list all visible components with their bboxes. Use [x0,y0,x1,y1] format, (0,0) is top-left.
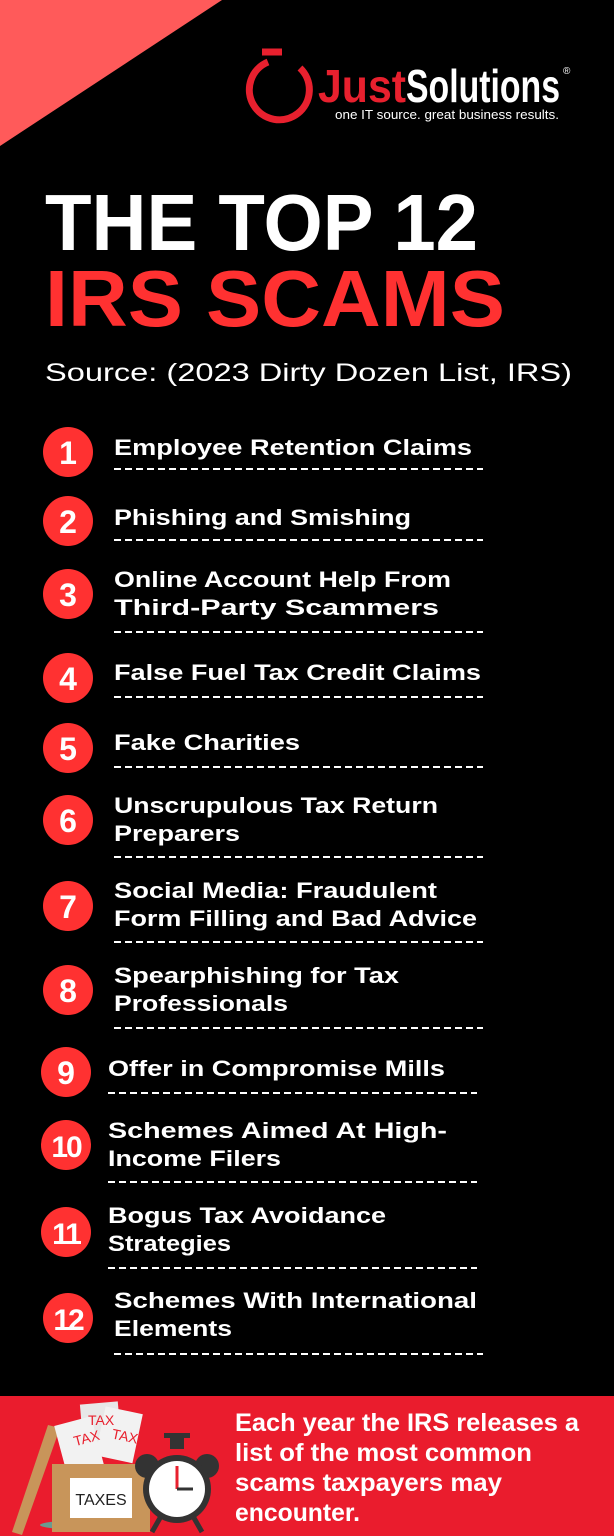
item 10: Schemes Aimed At High- [108,1118,447,1143]
item 2: 2 [59,504,77,540]
item 12: Schemes With International [114,1288,477,1313]
list of scams [41,427,483,1354]
item 3 [43,567,483,632]
item 3: Third-Party Scammers [114,595,439,620]
title [45,178,505,343]
item 8: Professionals [114,991,288,1016]
icon: alarm clock [135,1433,219,1532]
item 11: 11 [52,1218,81,1251]
title: THE TOP 12 [45,178,478,267]
icon: tax box [12,1401,150,1535]
item 12 [43,1288,483,1354]
logo [249,52,571,122]
item 7: Form Filling and Bad Advice [114,906,477,931]
icon: tax box: TAX [111,1426,140,1447]
item 2 [43,496,483,546]
item 1: Employee Retention Claims [114,435,472,460]
item 11 [41,1203,477,1268]
item 7 [43,878,483,942]
item 6 [43,793,483,857]
item 1 [43,427,483,477]
item 11: Strategies [108,1231,231,1256]
item 7: Social Media: Fraudulent [114,878,438,903]
item 12: Elements [114,1316,232,1341]
item 10 [41,1118,477,1182]
decorative corner triangle [0,0,222,146]
item 9 [41,1047,477,1097]
logo: Solutions [406,60,560,112]
footer text: encounter. [235,1499,360,1527]
title: IRS SCAMS [45,254,505,343]
item 10: 10 [51,1131,82,1164]
footer text [235,1409,580,1527]
icon: tax box: TAX [88,1412,115,1428]
item 3: Online Account Help From [114,567,451,592]
item 6: 6 [59,803,77,839]
logo: Just [318,60,406,112]
item 9: 9 [57,1055,75,1091]
item 4 [43,653,483,703]
item 8: Spearphishing for Tax [114,963,400,988]
item 4: False Fuel Tax Credit Claims [114,660,481,685]
footer text: Each year the IRS releases a [235,1409,580,1437]
item 7: 7 [59,889,77,925]
item 1: 1 [59,435,77,471]
source line: Source: (2023 Dirty Dozen List, IRS) [45,359,572,387]
item 9: Offer in Compromise Mills [108,1056,445,1081]
item 5 [43,723,483,773]
footer text: list of the most common [235,1439,532,1467]
item 12: 12 [53,1304,84,1337]
icon: tax box: TAX [72,1427,102,1449]
item 10: Income Filers [108,1146,281,1171]
item 6: Unscrupulous Tax Return [114,793,438,818]
item 3: 3 [59,577,77,613]
item 8: 8 [59,973,77,1009]
item 11: Bogus Tax Avoidance [108,1203,386,1228]
item 5: 5 [59,731,77,767]
logo: ® [563,66,571,77]
logo: one IT source. great business results. [335,107,559,122]
item 2: Phishing and Smishing [114,505,411,530]
item 8 [43,963,483,1028]
icon: tax box: TAXES [75,1492,127,1509]
footer text: scams taxpayers may [235,1469,502,1497]
icon: logo ring [249,52,309,120]
item 4: 4 [59,661,77,697]
item 5: Fake Charities [114,730,300,755]
item 6: Preparers [114,821,240,846]
footer band [0,1396,614,1536]
